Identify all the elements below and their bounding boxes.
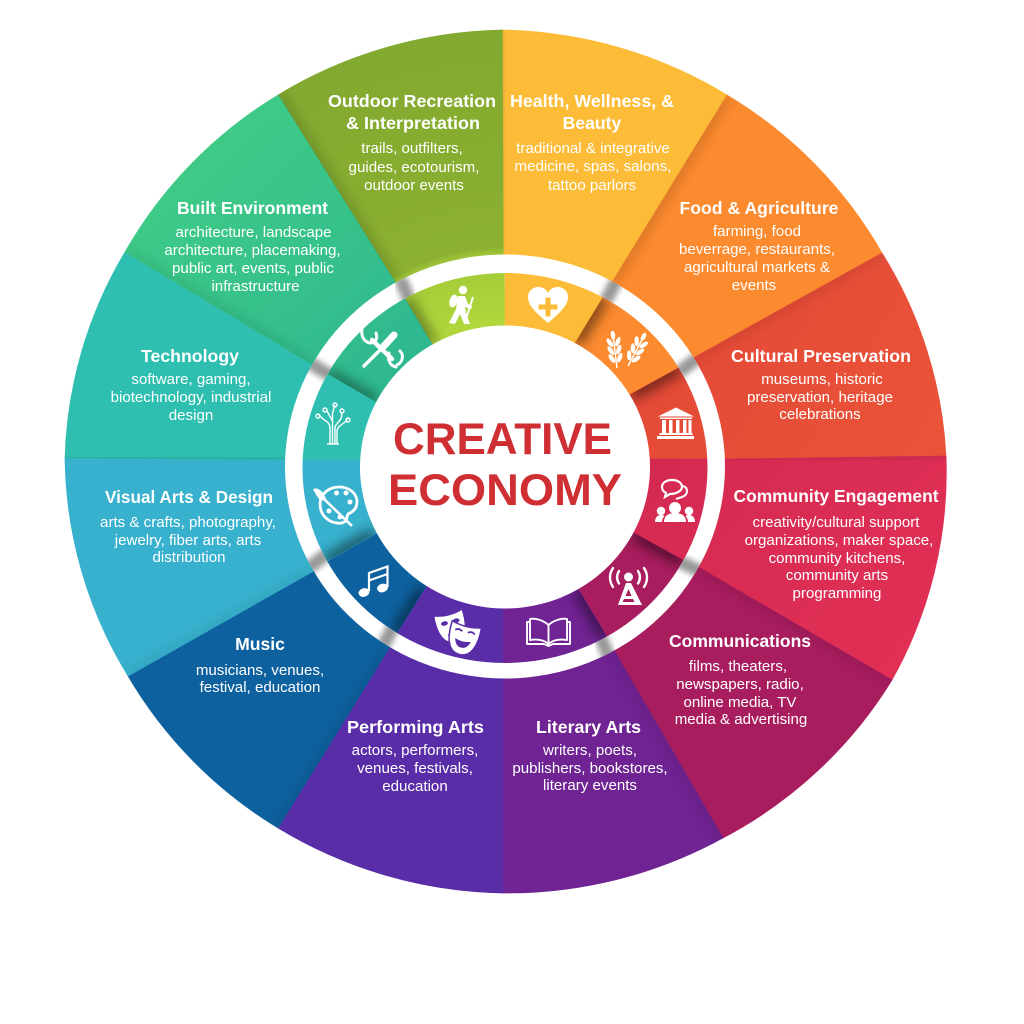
label: communications: newspapers, radio, — [676, 676, 804, 693]
icon: music notes — [358, 566, 389, 598]
label: outdoor recreation: guides, ecotourism, — [349, 159, 479, 176]
label: communications: online media, TV — [684, 694, 796, 711]
label: community engagement: community arts — [786, 567, 888, 584]
label: food and agriculture: Food & Agriculture — [680, 198, 839, 218]
label: technology: design — [169, 407, 213, 424]
segment: literary arts — [503, 467, 723, 893]
label: food and agriculture: farming, food — [713, 223, 801, 240]
label: literary arts: Literary Arts — [536, 717, 641, 737]
label: food and agriculture: agricultural markets & — [684, 259, 830, 276]
label: outdoor recreation — [328, 91, 496, 194]
label: health wellness beauty — [510, 91, 674, 194]
label: communications: media & advertising — [675, 711, 807, 728]
icon: heart with plus — [528, 287, 568, 323]
label: visual arts and design: distribution — [152, 549, 226, 566]
label: technology: software, gaming, — [131, 371, 251, 388]
icon: community people with speech bubbles — [655, 480, 695, 522]
label: community engagement: organizations, maker space, — [745, 532, 933, 549]
icon: wheat — [604, 329, 653, 370]
segment: community engagement — [505, 456, 946, 680]
label: cultural preservation: museums, historic — [761, 371, 883, 388]
label: community engagement: community kitchens, — [769, 550, 905, 567]
label: literary arts: writers, poets, — [542, 742, 637, 759]
segment: cultural preservation — [505, 253, 946, 467]
icon: painter palette — [313, 487, 357, 526]
label: communications — [669, 631, 811, 728]
label: cultural preservation — [731, 346, 911, 423]
title: ECONOMY — [388, 466, 622, 515]
label: communications: Communications — [669, 631, 811, 651]
segment: communications — [505, 467, 892, 838]
label: cultural preservation: celebrations — [779, 406, 861, 423]
label: technology — [111, 346, 271, 424]
icon: wrench and screwdriver — [362, 330, 402, 367]
label: visual arts and design: Visual Arts & Design — [105, 487, 273, 507]
label: community engagement — [734, 486, 939, 602]
label: literary arts: publishers, bookstores, — [512, 760, 668, 777]
segment: health wellness beauty — [503, 30, 727, 467]
label: performing arts: actors, performers, — [352, 742, 478, 759]
icon: hiker — [448, 286, 473, 324]
segment: technology — [65, 252, 505, 467]
label: health wellness beauty: tattoo parlors — [548, 177, 636, 194]
label: visual arts and design: arts & crafts, photography, — [100, 514, 276, 531]
label: health wellness beauty: Beauty — [563, 113, 622, 133]
label: health wellness beauty: traditional & integrative — [516, 140, 670, 157]
segment: music — [128, 467, 505, 828]
title: CREATIVE — [393, 415, 612, 464]
label: performing arts: venues, festivals, — [357, 760, 473, 777]
label: music: Music — [235, 634, 285, 654]
label: built environment: public art, events, public — [172, 260, 334, 277]
segment: visual arts and design — [65, 458, 505, 676]
icon: open book — [527, 619, 570, 646]
label: music: festival, education — [200, 679, 320, 696]
label: literary arts: literary events — [543, 777, 637, 794]
white ring — [285, 254, 725, 678]
label: community engagement: Community Engagement — [734, 486, 939, 506]
label: built environment — [164, 198, 341, 295]
label: health wellness beauty: Health, Wellness, & — [510, 91, 674, 111]
label: performing arts: Performing Arts — [347, 717, 484, 737]
label: literary arts — [512, 717, 668, 794]
segment: performing arts — [278, 467, 505, 893]
label: technology: Technology — [141, 346, 239, 366]
label: built environment: architecture, placemaking, — [164, 242, 341, 259]
label: built environment: Built Environment — [177, 198, 328, 218]
label: built environment: infrastructure — [211, 278, 300, 295]
label: cultural preservation: preservation, heritage — [747, 389, 893, 406]
label: music — [196, 634, 324, 696]
segment: food and agriculture — [505, 95, 882, 467]
wheel: twelve coloured segments — [65, 30, 946, 893]
icon: theatre masks — [434, 610, 482, 658]
label: music: musicians, venues, — [196, 662, 324, 679]
label: outdoor recreation: trails, outfilters, — [361, 140, 463, 157]
segment: built environment — [125, 95, 505, 467]
label: outdoor recreation: & Interpretation — [346, 113, 480, 133]
label: outdoor recreation: outdoor events — [364, 177, 464, 194]
title — [388, 415, 622, 515]
segment: outdoor recreation — [278, 30, 505, 467]
label: community engagement: programming — [793, 585, 881, 602]
label: food and agriculture — [679, 198, 839, 294]
label: food and agriculture: beverrage, restaurants, — [679, 241, 835, 258]
icon: museum temple — [657, 408, 694, 439]
label: outdoor recreation: Outdoor Recreation — [328, 91, 496, 111]
label: built environment: architecture, landscape — [175, 224, 332, 241]
icon: broadcast tower — [610, 568, 647, 605]
centre circle — [360, 326, 650, 608]
label: communications: films, theaters, — [689, 658, 787, 675]
label: performing arts — [347, 717, 484, 795]
label: health wellness beauty: medicine, spas, salons, — [515, 158, 671, 175]
icon: circuit tree — [316, 403, 350, 444]
label: performing arts: education — [382, 778, 448, 795]
label: community engagement: creativity/cultural support — [753, 514, 920, 531]
label: visual arts and design: jewelry, fiber arts, arts — [114, 532, 261, 549]
label: visual arts and design — [100, 487, 276, 566]
label: food and agriculture: events — [732, 277, 776, 294]
label: technology: biotechnology, industrial — [111, 389, 271, 406]
label: cultural preservation: Cultural Preservation — [731, 346, 911, 366]
